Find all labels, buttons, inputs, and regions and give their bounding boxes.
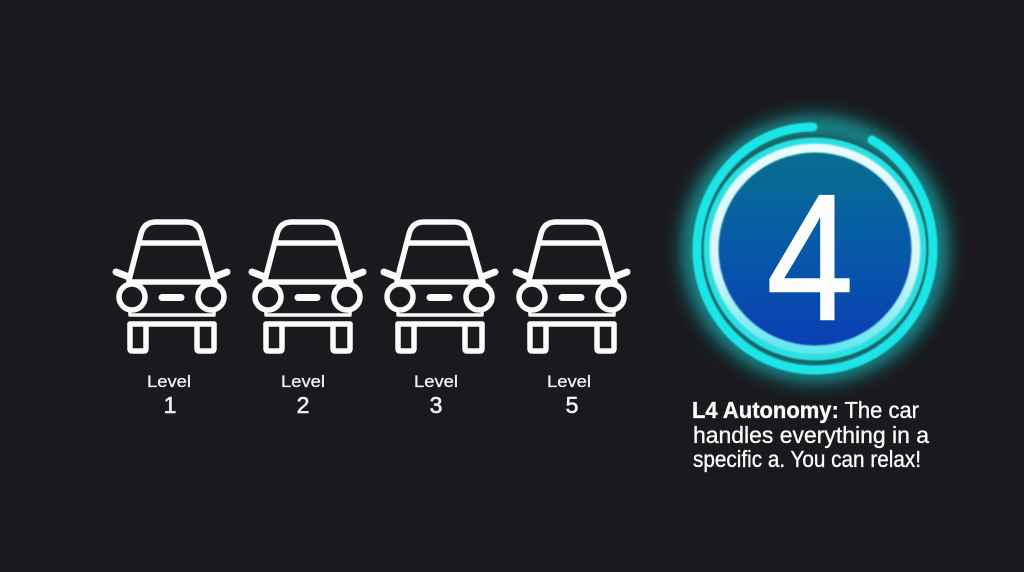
- label: level 5: [547, 372, 591, 418]
- label: level 1: Level: [147, 372, 191, 391]
- label: level 5: Level: [547, 372, 591, 391]
- label: level 1: 1: [164, 392, 176, 418]
- icon: level 2 car: [252, 222, 363, 351]
- icon: level 1 car: [116, 222, 227, 351]
- description text: [692, 397, 929, 472]
- description text: specific a. You can relax!: [693, 446, 921, 472]
- label: level 5: 5: [566, 392, 578, 418]
- description text: L4 Autonomy: The car: [692, 397, 919, 423]
- icon: level 4 car: [516, 222, 627, 351]
- label: level 2: [281, 372, 325, 418]
- label: level 2: Level: [281, 372, 325, 391]
- label: level 3: Level: [414, 372, 458, 391]
- icon: level 3 car: [384, 222, 495, 351]
- numeral 4: 4: [766, 156, 854, 358]
- description text: handles everything in a: [693, 422, 929, 448]
- label: level 1: [147, 372, 191, 418]
- label: level 2: 2: [297, 392, 309, 418]
- label: level 3: [414, 372, 458, 418]
- label: level 3: 3: [430, 392, 442, 418]
- badge: level 4 glowing circle: [693, 127, 937, 371]
